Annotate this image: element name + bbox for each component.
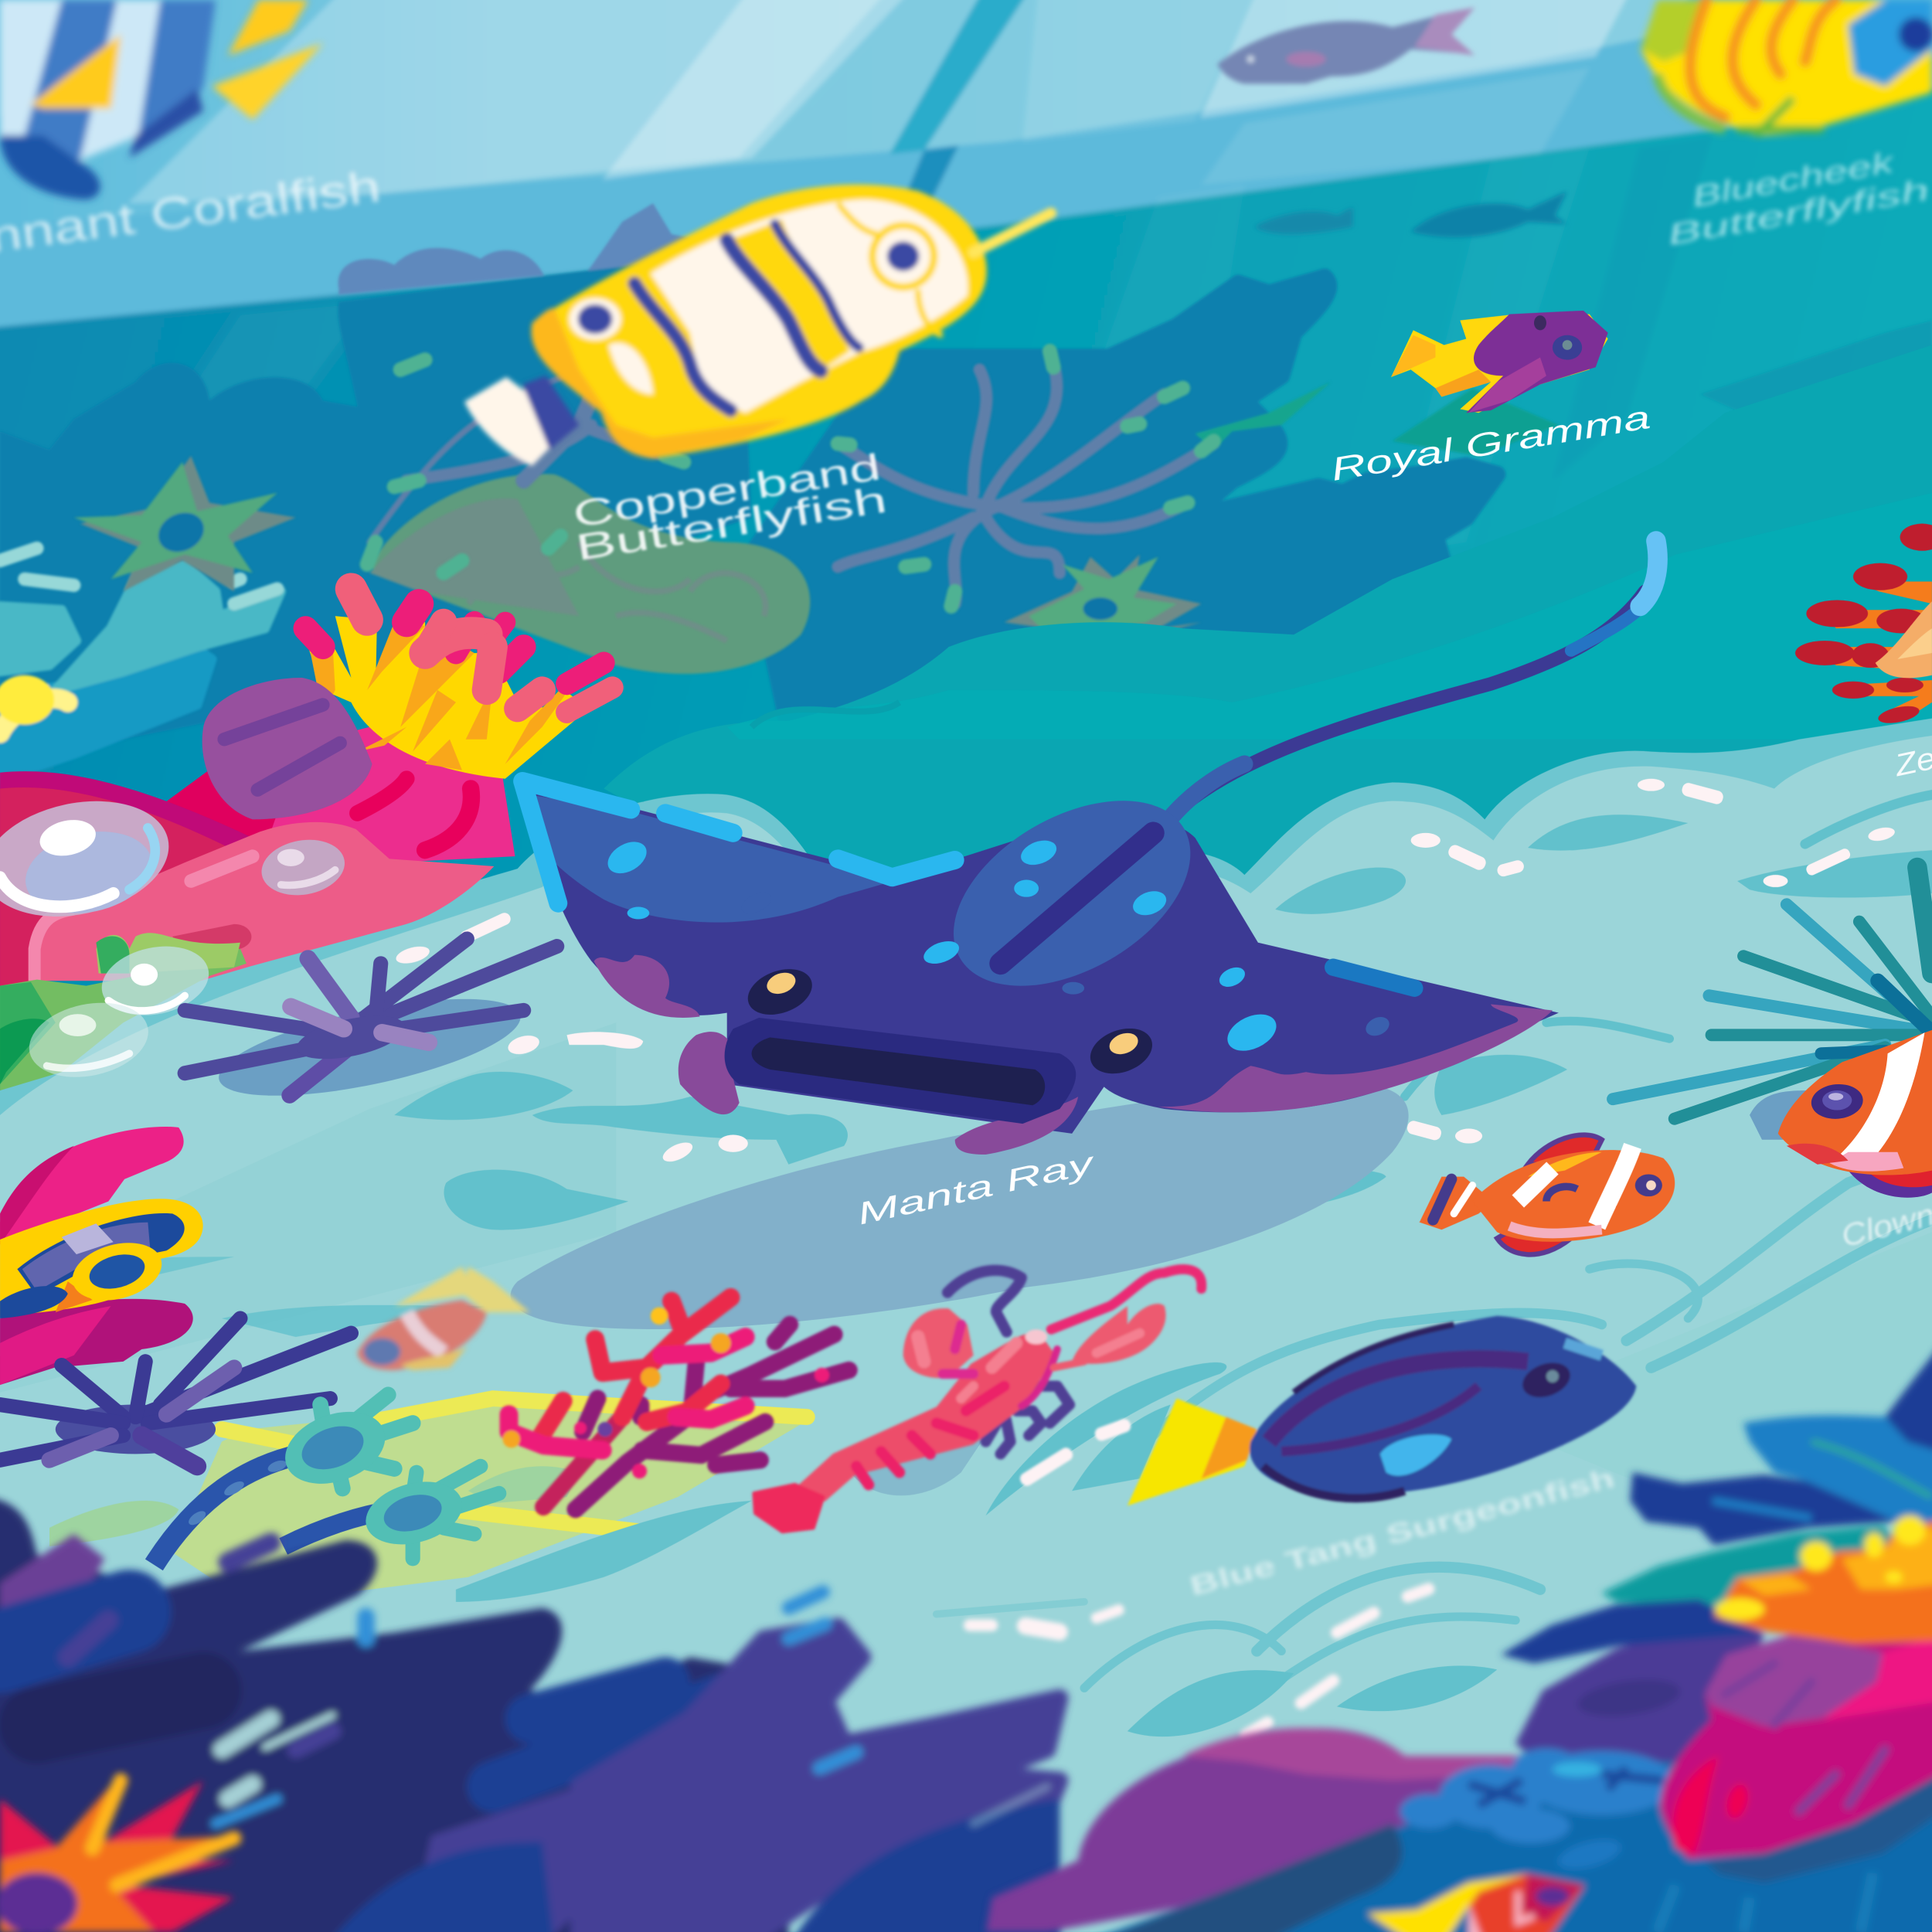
sea urchin: teal [1613,867,1932,1119]
star coral: green centre [1004,554,1202,647]
label: Blue Tang Surgeonfish: Blue Tang Surgeonfish [1187,1463,1617,1601]
fish: striped coralfish top left [0,0,323,199]
lobster [754,1269,1202,1532]
foreground coral: navy, blue and purple [0,1497,1060,1932]
star coral: green left [74,456,296,591]
fish: clownfish small [1420,1135,1675,1254]
label: Royal Gramma: Royal Gramma [1328,398,1653,488]
mask fish and pink coral left [0,1127,203,1385]
fish: faded clownfish [357,1267,530,1370]
fish: blue tang [1128,1316,1636,1505]
yellow green sand patch [49,1399,813,1602]
manta ray [519,541,1658,1155]
teal polyp flowers [154,1395,499,1565]
teal hill [604,345,1932,887]
fish: clownfish large [1750,1030,1932,1198]
label: Copperband Butterflyfish [568,447,889,569]
sea urchin: purple [185,939,557,1115]
bubbles [0,785,349,1087]
fish: copperband butterflyfish [464,185,1051,466]
distant fish silhouettes [1217,8,1567,237]
fish: royal gramma [1391,311,1608,413]
green coral [0,933,247,1090]
fish: bluecheek butterflyfish [1641,0,1932,135]
sand sparkles [394,779,1896,1743]
label: Bluecheek Butterflyfish [1659,141,1932,252]
sea urchin: dark [0,1318,351,1466]
yellow tentacle fan [308,616,589,779]
label: Copperband Butterflyfish: Butterflyfish [573,479,889,569]
light blue coral left [0,549,281,779]
brain coral: green [369,474,810,674]
lionfish (cut at edge) [1795,524,1932,726]
sand ripples [25,794,1932,1736]
anemone: grey tentacles [367,351,1213,606]
label: Copperband Butterflyfish: Copperband [570,447,883,536]
label: Bluecheek Butterflyfish: Bluecheek [1689,145,1898,214]
coral: red and magenta [503,1298,849,1509]
foreground star coral: orange [0,1774,240,1932]
sandy sea floor [0,719,1932,1932]
manta ray shadow [511,1084,1409,1329]
pink anemone [0,589,612,986]
coral silhouettes behind [0,203,1932,764]
label: Manta Ray: Manta Ray [854,1146,1099,1232]
label: Bluecheek Butterflyfish: Butterflyfish [1665,173,1932,252]
foreground rocks: bottom right [986,1337,1932,1932]
